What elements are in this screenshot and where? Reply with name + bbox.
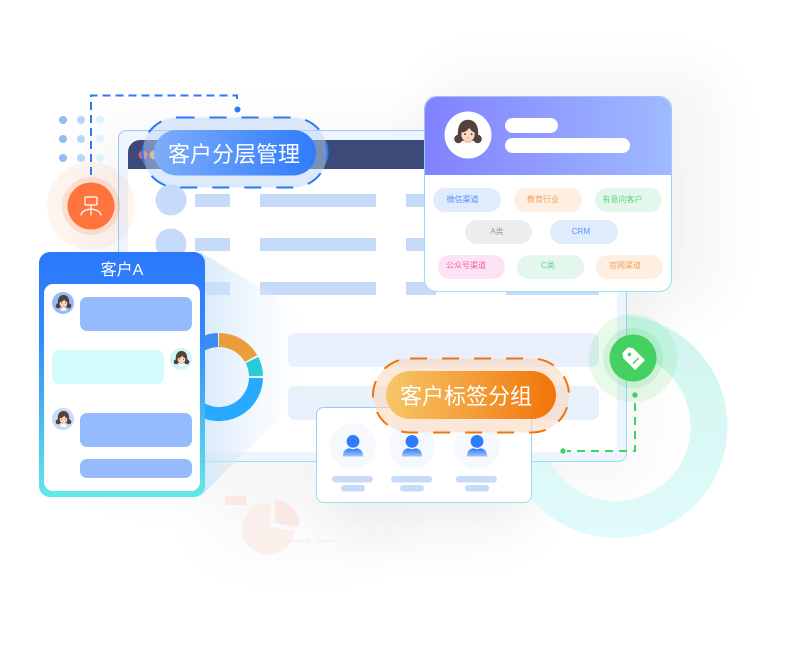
profile header	[425, 97, 671, 175]
blue dashed connector	[91, 96, 240, 175]
light beam	[200, 252, 300, 497]
pill: customer tag grouping	[373, 358, 569, 432]
person 2	[389, 423, 435, 492]
chat avatars	[52, 292, 192, 430]
person 3	[454, 423, 500, 492]
decorative dots	[59, 116, 104, 162]
background soft shadows	[90, 70, 720, 560]
tag group: C类	[541, 260, 555, 270]
chat bubbles	[52, 297, 192, 478]
tag group: A类	[490, 226, 504, 236]
tag group: 有意向客户	[602, 194, 642, 204]
icon: orange organization node	[47, 162, 135, 250]
dashboard window	[118, 130, 626, 462]
customer group card	[316, 408, 532, 502]
tag group: 教育行业	[527, 194, 559, 204]
pill: customer tiering	[142, 118, 328, 188]
green dashed connector	[560, 392, 638, 454]
icon: profile avatar	[444, 112, 492, 158]
tag group: 官网渠道	[609, 260, 641, 270]
window title bar	[128, 140, 430, 169]
profile card	[424, 96, 672, 292]
icon: green tag node	[589, 314, 677, 402]
table rows	[156, 184, 599, 295]
donut chart	[190, 340, 256, 414]
person 1	[330, 423, 376, 492]
decorative ring	[505, 315, 728, 538]
card title: 客户A	[101, 261, 144, 279]
faded decorative pie chart	[225, 496, 336, 555]
customer A chat card	[39, 252, 205, 497]
pill: customer tiering: 客户分层管理	[168, 142, 300, 167]
content blocks	[288, 333, 599, 420]
tag group: CRM	[572, 227, 590, 236]
tag group: 微信渠道	[446, 194, 478, 204]
tag group	[433, 188, 663, 279]
pill: customer tag grouping: 客户标签分组	[400, 384, 532, 409]
tag group: 公众号渠道	[446, 260, 486, 270]
